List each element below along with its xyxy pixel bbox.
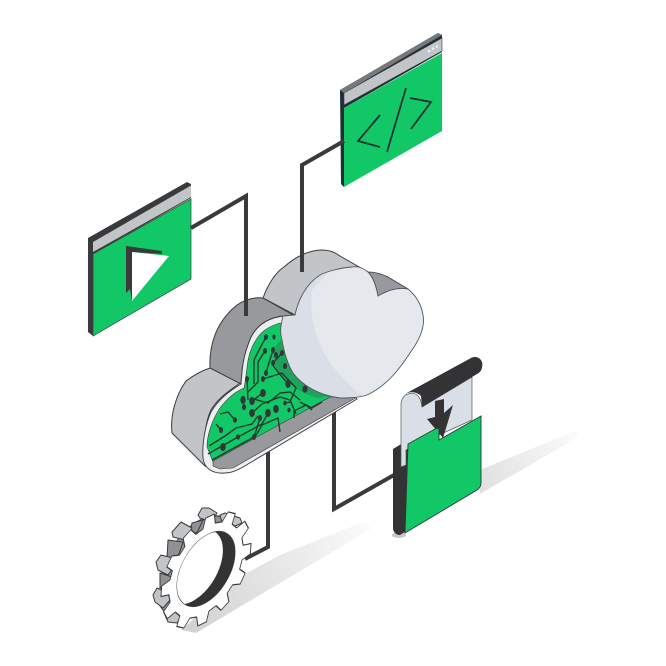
circuit nodes [219,334,308,451]
cloud [172,250,430,473]
cloud: upper-left dark side [210,298,293,384]
cloud: circuit board [207,323,330,462]
cloud: face highlight [312,268,423,396]
icon: play shadow [126,246,162,301]
window body [344,53,442,187]
shadow: gear [181,521,371,633]
icon: code brackets [358,88,431,152]
gear: back disc [160,499,236,631]
connector: code window to cloud [302,141,344,272]
gear: hole [176,530,236,608]
illustration: cloud with connected services [88,33,564,633]
cloud: lower-left side [172,368,240,466]
connector: cloud to gear [245,450,268,559]
window header [93,186,191,252]
cloud: top side [263,250,368,315]
window body [93,199,191,336]
connector: video window to cloud [191,196,246,316]
icon: play triangle [132,252,169,301]
cloud: right dark side [368,272,408,296]
gear: dark root segments [158,520,248,613]
connector: cloud to folder [334,412,394,509]
window: video player [88,182,191,336]
folder: roll [405,357,482,407]
cloud: front face [281,267,423,398]
cloud: face outline [281,267,423,398]
folder: back panel [393,440,408,535]
icon: download arrow [427,399,453,438]
shadow: folder [480,430,580,494]
window: code editor [340,33,442,187]
icon: folder with download [392,357,482,538]
folder: paper [401,377,472,467]
circuit traces [208,337,322,460]
icon: gear [152,508,252,629]
cloud: cut-out rim [203,316,357,473]
folder: ground shadow [392,532,406,538]
window dots [428,45,438,52]
cloud: inner floor [213,397,357,469]
gear: extruded teeth [153,508,242,623]
window header [344,38,442,105]
gear: front face [157,495,255,645]
folder: front panel [405,416,481,533]
circuit shadow band [272,340,330,398]
